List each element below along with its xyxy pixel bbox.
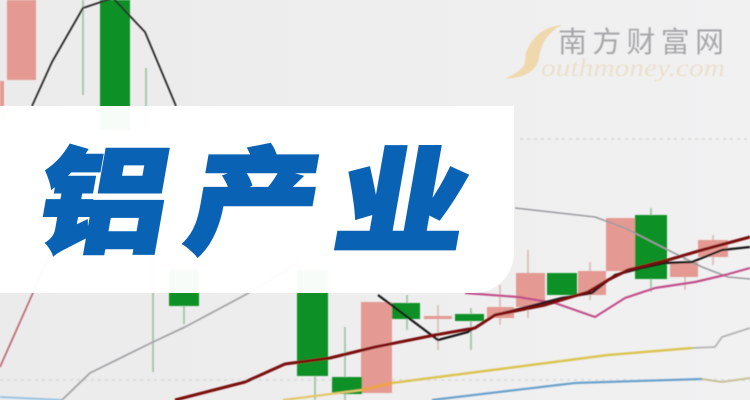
watermark latin name: outhmoney.com [541,55,725,82]
title panel [0,106,514,293]
falling candles [100,0,667,394]
watermark logo [505,25,725,82]
watermark swoosh [505,25,562,79]
candle wicks [83,0,651,400]
title: 铝产业 [29,140,479,268]
watermark chinese name: 南方财富网 [558,26,724,59]
dotted grid lines [0,139,750,380]
